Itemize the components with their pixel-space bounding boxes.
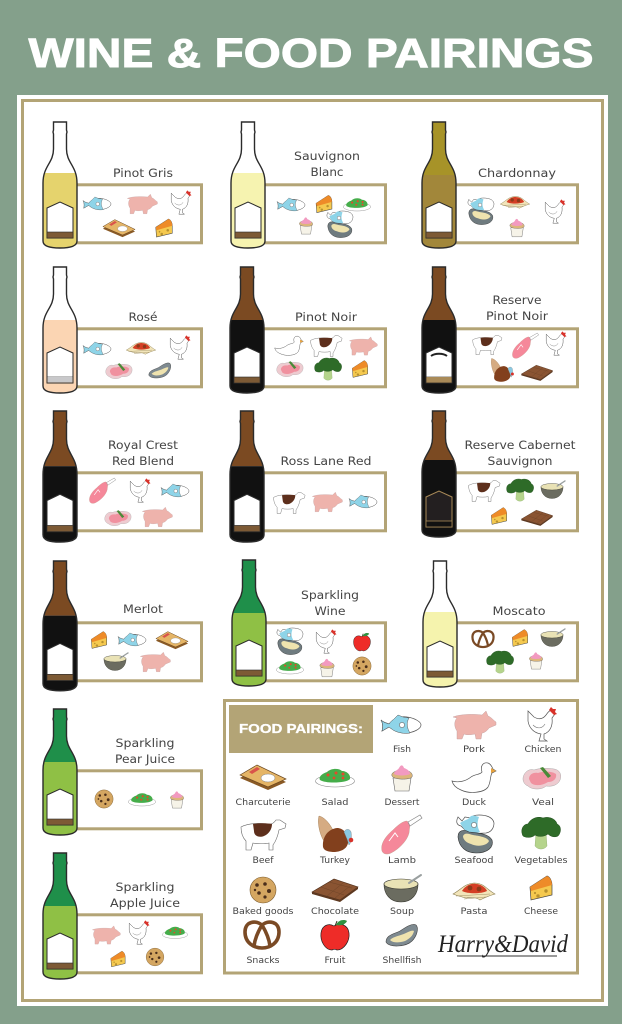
bottle <box>231 121 265 249</box>
legend: shellfish: Shellfish <box>382 956 422 966</box>
logo: Harry & David: Harry&David <box>437 931 568 958</box>
panel: Reserve Pinot Noir <box>422 266 578 394</box>
wine name <box>464 439 576 468</box>
legend: pork: Pork <box>463 745 486 755</box>
panel: Chardonnay <box>422 121 578 249</box>
bottle <box>43 708 77 836</box>
legend: baked goods: Baked goods <box>232 907 294 917</box>
food icons <box>468 196 566 237</box>
legend: seafood <box>454 815 494 866</box>
food icons <box>83 335 190 379</box>
wine name <box>486 294 548 323</box>
food icons <box>277 195 371 238</box>
panel: Sparkling Wine <box>232 559 386 687</box>
wine name <box>115 737 175 766</box>
legend: chocolate: Chocolate <box>311 907 359 917</box>
bottle <box>422 410 456 538</box>
wine name: Sparkling <box>116 737 174 750</box>
food icons <box>92 920 188 967</box>
wine name: Reserve Cabernet <box>464 439 576 452</box>
legend: baked goods <box>232 877 294 917</box>
title: WINE & FOOD PAIRINGS <box>28 30 594 76</box>
wine name: Moscato <box>492 605 546 618</box>
legend: pasta: Pasta <box>460 907 488 917</box>
legend: cheese <box>524 876 558 917</box>
legend: turkey <box>318 816 353 866</box>
panel: Reserve Cabernet Sauvignon <box>422 410 578 538</box>
wine name: Pinot Gris <box>113 167 173 180</box>
bottle <box>230 266 264 394</box>
legend: lamb <box>382 815 422 866</box>
legend: salad <box>316 769 354 808</box>
wine name: Apple Juice <box>110 897 180 910</box>
bottle <box>423 560 457 688</box>
legend: salad: Salad <box>322 798 348 808</box>
legend: beef <box>241 820 286 866</box>
panel: Pinot Noir <box>230 266 386 394</box>
legend: dessert: Dessert <box>384 798 420 808</box>
food icons <box>472 629 565 673</box>
pairing frame <box>70 623 202 681</box>
wine name: Pear Juice <box>115 753 175 766</box>
wine name: Blanc <box>310 166 344 179</box>
legend: veal: Veal <box>532 798 554 808</box>
panel: Merlot <box>43 560 202 692</box>
legend: duck: Duck <box>462 798 487 808</box>
food icons <box>469 479 565 526</box>
pairing frame <box>258 623 386 681</box>
legend: beef: Beef <box>252 856 274 866</box>
pairing frame <box>70 771 202 829</box>
legend: snacks: Snacks <box>246 956 280 966</box>
legend: chocolate <box>311 879 359 917</box>
legend: charcuterie <box>236 765 291 808</box>
bottle <box>422 266 456 394</box>
wine name: Red Blend <box>112 455 174 468</box>
wine name: Rosé <box>128 311 158 324</box>
wine name <box>110 881 180 910</box>
legend: lamb: Lamb <box>388 856 416 866</box>
wine name <box>301 589 359 618</box>
pairing frame <box>449 185 578 243</box>
legend: charcuterie: Charcuterie <box>236 798 291 808</box>
legend: seafood: Seafood <box>454 856 494 866</box>
wine name: Royal Crest <box>108 439 179 452</box>
legend: vegetables <box>514 817 568 866</box>
food icons <box>274 492 377 514</box>
wine name: Sauvignon <box>488 455 552 468</box>
bottle <box>43 410 77 543</box>
food icons <box>275 336 377 380</box>
wine name: Pinot Noir <box>486 310 548 323</box>
wine name: Sparkling <box>116 881 174 894</box>
bottle <box>422 121 456 249</box>
legend: fish: Fish <box>393 745 411 755</box>
bottle <box>232 559 266 687</box>
legend: fruit: Fruit <box>324 956 346 966</box>
wine name: Reserve <box>492 294 542 307</box>
food icons <box>276 628 371 677</box>
legend: dessert <box>384 765 420 808</box>
food icons <box>473 331 566 382</box>
legend: soup <box>384 875 421 917</box>
wine name: Pinot Noir <box>295 311 357 324</box>
legend frame <box>224 700 578 973</box>
legend: snacks <box>245 922 280 966</box>
wine name: Chardonnay <box>478 167 556 180</box>
pairing frame <box>70 473 202 531</box>
food icons <box>91 632 188 672</box>
pairing frame <box>449 329 578 387</box>
panel: Sparkling Pear Juice <box>43 708 202 836</box>
legend: chicken <box>524 707 562 755</box>
wine name: Ross Lane Red <box>280 455 372 468</box>
food icons <box>83 190 192 237</box>
legend: chicken: Chicken <box>524 745 562 755</box>
food icons <box>95 790 184 808</box>
legend: veal <box>523 767 561 808</box>
legend: pork <box>453 711 496 755</box>
panel: Rose <box>43 266 202 394</box>
legend heading: FOOD PAIRINGS: <box>239 721 363 736</box>
bottle <box>43 266 77 394</box>
wine name <box>294 150 360 179</box>
panel: Royal Crest Red Blend <box>43 410 202 543</box>
panel: Ross Lane Red <box>230 410 386 543</box>
legend panel: food pairings <box>224 700 578 973</box>
pairing frame <box>258 473 386 531</box>
food icons <box>89 478 189 527</box>
legend: cheese: Cheese <box>524 907 558 917</box>
wine name: Wine <box>314 605 346 618</box>
legend: shellfish <box>382 924 422 966</box>
pairing frame <box>449 473 578 531</box>
pairing frame <box>449 623 578 681</box>
legend: fish <box>381 715 421 755</box>
wine name: Sauvignon <box>294 150 360 163</box>
panel: Pinot Gris <box>43 121 202 249</box>
pairing frame <box>70 329 202 387</box>
wine name: Merlot <box>123 603 164 616</box>
bottle <box>230 410 264 543</box>
bottle <box>43 121 77 249</box>
legend: pasta <box>453 883 495 917</box>
pairing frame <box>70 185 202 243</box>
pairing frame <box>70 915 202 973</box>
bottle <box>43 852 77 980</box>
legend: soup: Soup <box>390 907 414 917</box>
wine name: Sparkling <box>301 589 359 602</box>
wine name <box>108 439 179 468</box>
bottle <box>43 560 77 692</box>
pairing frame <box>258 329 386 387</box>
legend: turkey: Turkey <box>319 856 351 866</box>
panel: Moscato <box>423 560 578 688</box>
legend: fruit <box>321 920 349 966</box>
legend heading <box>229 705 373 753</box>
panel: Sauvignon Blanc <box>231 121 386 249</box>
legend: duck <box>452 763 496 808</box>
pairing frame <box>258 185 386 243</box>
legend: vegetables: Vegetables <box>514 856 568 866</box>
panel: Sparkling Apple Juice <box>43 852 202 980</box>
